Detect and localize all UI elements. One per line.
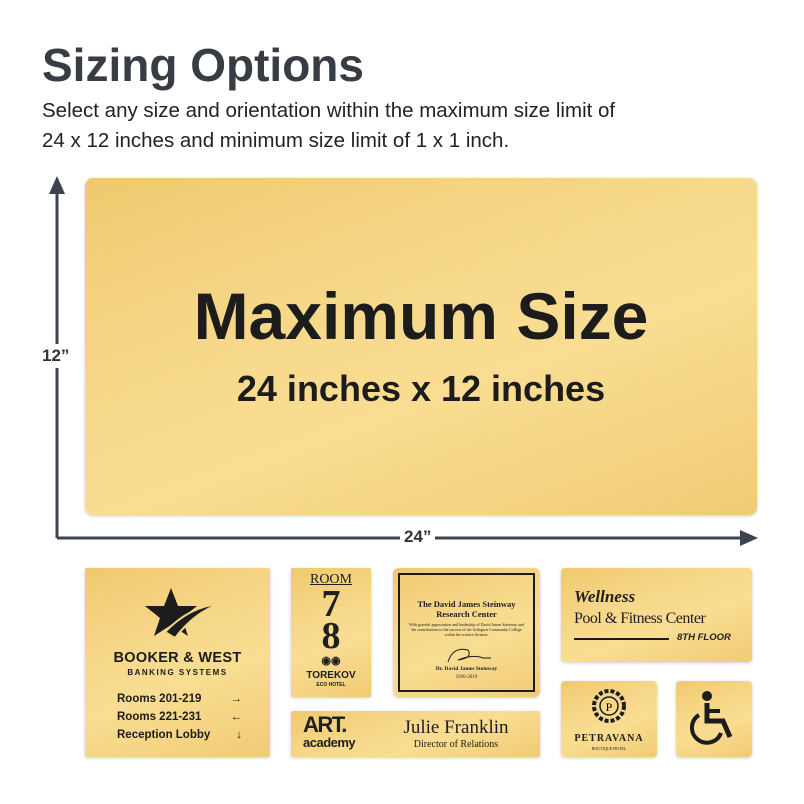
panel: accessibility sign [676,681,752,757]
icon: crest: P [606,700,613,714]
text: room directions: ↓ [236,729,242,741]
panel: art academy nameplate: academy [303,735,355,750]
icon: torekov logo: ◉◉ [321,655,341,667]
panel: wellness sign: 8TH FLOOR [677,632,731,643]
text: dimensions: 24 inches x 12 inches [237,368,605,409]
panel: steinway plaque: Research Center [436,609,497,619]
panel: room 78 sign: ROOM [310,572,352,587]
arrow: horizontal 24 inches [57,530,758,546]
text: room directions: Rooms 201-219 [117,693,201,705]
panel: booker & west sign [85,568,270,757]
icon: crest [592,689,626,723]
panel: room 78 sign: 8 [322,615,340,657]
text: room directions: Rooms 221-231 [117,711,201,723]
panel: petravana sign: BOUTIQUE HOTEL [592,746,626,751]
subtitle: Select any size and orientation within the maximum size limit of [42,99,615,122]
panel: room 78 sign: 7 [322,583,340,625]
panel: steinway plaque: With grateful appreciation and leadership of David James Steinway and the contributions to the success of the Arlington Community College within the science division. [409,622,524,637]
panel: room 78 sign: ECO HOTEL [316,682,346,688]
panel: steinway plaque [393,568,540,697]
label: 24": 24” [404,527,431,546]
panel: wellness sign [561,568,752,662]
icon: star [145,588,212,638]
panel: art academy nameplate: Director of Relations [414,739,498,750]
panel: steinway plaque: The David James Steinway [418,599,516,609]
text: room directions: → [230,693,242,705]
icon: wheelchair [690,691,732,745]
heading: maximum size: Maximum Size [194,279,648,353]
panel: wellness sign: Wellness [574,587,635,606]
panel: wellness sign: Pool & Fitness Center [574,610,705,627]
panel: booker & west sign: BANKING SYSTEMS [127,668,228,677]
title: Sizing Options [42,39,364,91]
subtitle [42,99,616,152]
panel: steinway plaque: 1936-2019 [456,675,477,680]
text: room directions: ← [230,711,242,723]
text: booker & west: BOOKER & WEST [114,650,241,666]
arrow: vertical 12 inches [49,176,65,538]
panel: art academy nameplate: Julie Franklin [403,717,509,738]
panel: room 78 sign: TOREKOV [306,670,356,681]
panel: maximum size plaque [85,178,757,515]
text: room directions [117,693,242,741]
panel: petravana sign: PETRAVANA [574,733,644,744]
panel: steinway plaque: Dr. David James Steinway [436,666,497,672]
panel: petravana sign [561,681,657,757]
panel: art academy nameplate [291,711,540,757]
label: 12": 12” [42,346,69,365]
text: room directions: Reception Lobby [117,729,210,741]
panel: room 78 sign [291,568,371,697]
icon: signature [448,648,491,662]
subtitle: 24 x 12 inches and minimum size limit of 1 x 1 inch. [42,129,509,152]
icon: art academy logo: ART. [303,712,346,737]
